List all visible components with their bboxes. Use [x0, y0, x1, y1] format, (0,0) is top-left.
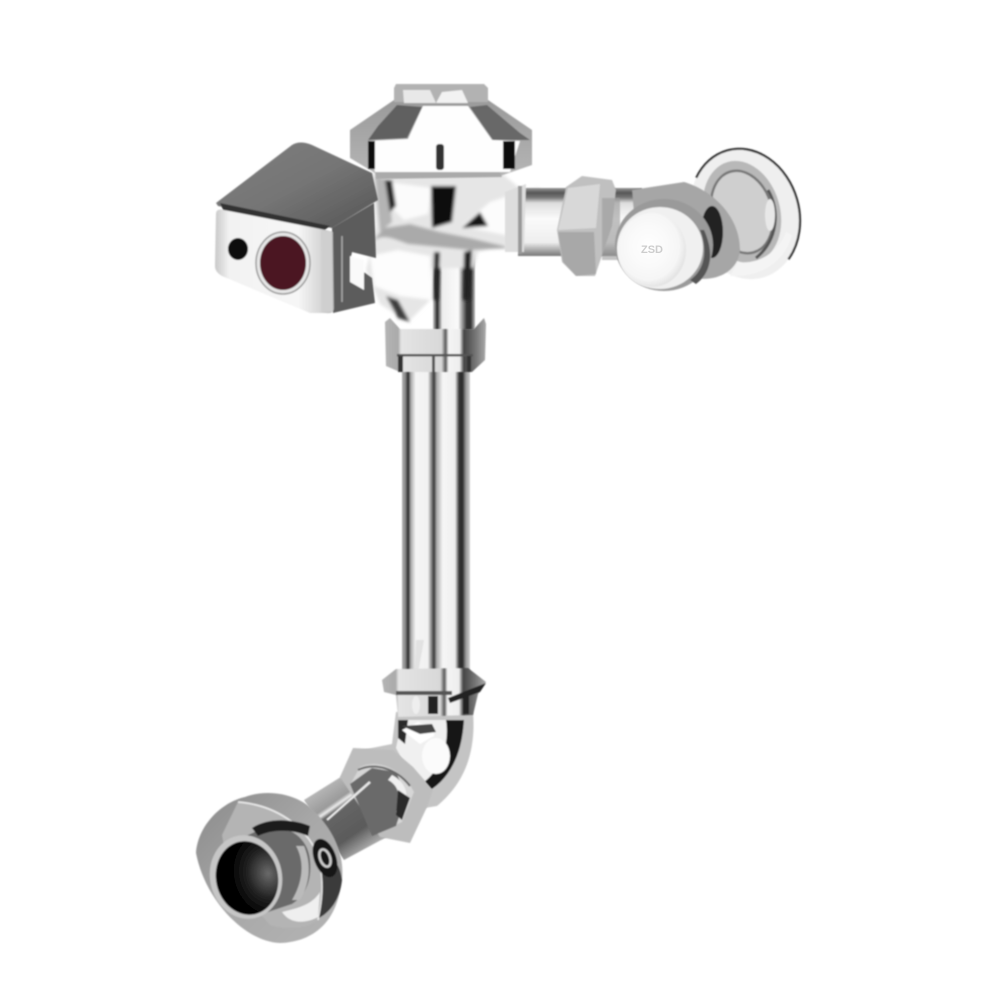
push button face with logo: ZSD: [641, 244, 663, 256]
push button face with logo: [618, 213, 686, 287]
top octagonal cap: [350, 84, 532, 179]
upper pipe collar: [385, 318, 486, 372]
inner spigot: [246, 826, 310, 914]
top nut: [394, 84, 488, 102]
main vertical pipe: [402, 368, 470, 695]
lower pipe collar: [382, 668, 486, 717]
drain opening: [202, 828, 290, 926]
push button housing: [615, 182, 740, 291]
horizontal tube to wall: [505, 184, 642, 256]
floor flange: [196, 793, 342, 943]
lower hex nut: [327, 748, 433, 843]
hex coupling nut: [557, 176, 620, 276]
valve body: [366, 172, 540, 322]
sensor small dot: [228, 238, 248, 260]
upper pipe neck: [433, 250, 475, 330]
drain mount screw: [308, 835, 342, 881]
housing top face: [216, 142, 378, 228]
lower angled tube: [304, 775, 396, 860]
housing front face: [215, 210, 334, 313]
wall flange: [675, 136, 815, 292]
housing dark side: [332, 203, 376, 313]
lower elbow: [352, 712, 474, 812]
sensor housing: [215, 142, 378, 313]
sensor window: [256, 232, 310, 294]
